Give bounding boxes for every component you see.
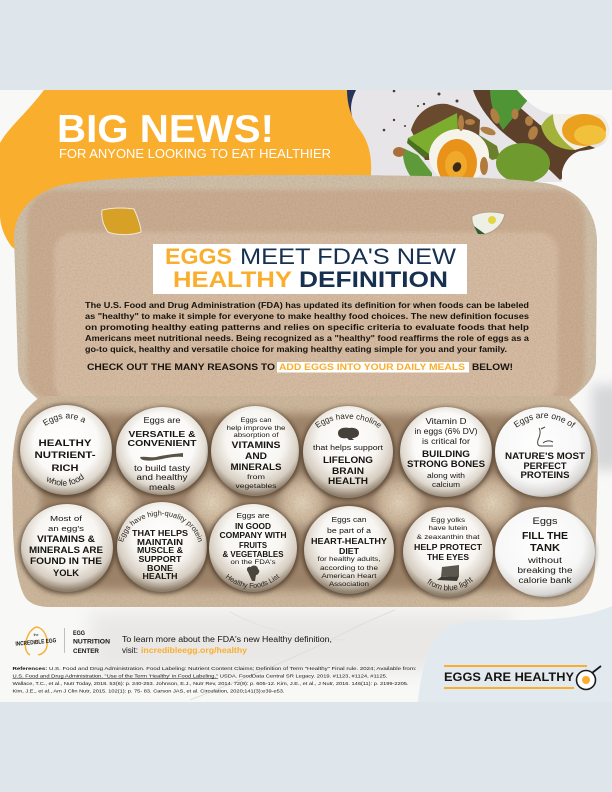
egg: heart-healthy diet: be part of a xyxy=(327,526,372,535)
badge: eggs are healthy xyxy=(444,665,601,690)
egg: vitamins and minerals: from xyxy=(247,474,266,481)
website note: To learn more about the FDA's new Healthy definition, xyxy=(122,634,332,644)
logo: the incredible egg: the xyxy=(34,633,38,637)
egg: vitamins in the yolk xyxy=(19,504,115,594)
intro paragraph: The U.S. Food and Drug Administration (FDA) has updated its definition for when foods can be labeled xyxy=(85,301,529,310)
title box: DEFINITION xyxy=(299,267,448,292)
egg: versatile and convenient xyxy=(114,407,210,497)
logo: egg nutrition center: EGG xyxy=(73,630,85,637)
egg: fill the tank: breaking the xyxy=(518,566,573,575)
title box: HEALTHY xyxy=(173,267,292,292)
egg: healthy nutrient-rich xyxy=(15,401,116,500)
egg: heart-healthy diet: Association xyxy=(329,581,369,588)
egg: vitamins and minerals: VITAMINS xyxy=(232,440,280,450)
logo: the incredible egg: INCREDIBLE EGG xyxy=(15,638,57,648)
egg: vitamins in the yolk: MINERALS ARE xyxy=(29,545,103,555)
egg: help protect the eyes: & zeaxanthin that xyxy=(416,534,480,541)
headline xyxy=(57,108,331,161)
egg: heart-healthy diet: according to the xyxy=(320,565,378,572)
references: Wallace, T.C., et al., Nutr Today, 2018. 53(6): p. 240-253. Johnson, E.J., Nutr Rev, 2014. 72(9): p. 605-12. Kim, J.E., et al., J Nutr, 2016. 146(11): p. 2199-2205. xyxy=(12,681,408,687)
egg: building strong bones: in eggs (6% DV) xyxy=(414,427,478,436)
egg: healthy nutrient-rich: NUTRIENT- xyxy=(34,450,96,460)
egg: good company with fruits and vegetables: IN GOOD xyxy=(235,522,271,531)
egg: high-quality protein: BONE xyxy=(147,564,174,573)
egg: vitamins and minerals: help improve the xyxy=(226,425,286,432)
call to action line: BELOW! xyxy=(472,362,513,372)
egg: help protect the eyes: from blue light xyxy=(427,577,473,590)
egg: versatile and convenient: Eggs are xyxy=(144,416,180,425)
egg: heart-healthy diet: DIET xyxy=(339,547,359,556)
website note xyxy=(122,634,332,655)
egg: good company with fruits and vegetables: on the FDA's xyxy=(230,559,276,566)
logo: egg nutrition center: NUTRITION xyxy=(73,638,110,646)
egg: building strong bones xyxy=(398,407,494,499)
lid hole left xyxy=(102,208,141,235)
egg: fill the tank: Eggs xyxy=(532,515,558,526)
egg: good company with fruits and vegetables: & VEGETABLES xyxy=(222,550,284,559)
egg: building strong bones: Vitamin D xyxy=(426,417,467,426)
egg: fill the tank xyxy=(494,507,596,599)
title box: MEET FDA'S NEW xyxy=(240,244,456,269)
icon: frying pan xyxy=(576,666,601,690)
egg: nature's most perfect proteins: NATURE'S MOST xyxy=(505,451,586,461)
intro paragraph: as "healthy" to make it simple for everyone to make healthy food choices. The new definition focuses xyxy=(85,312,530,321)
website note: incredibleegg.org/healthy xyxy=(141,645,247,655)
logo: egg nutrition center: CENTER xyxy=(73,648,99,655)
references xyxy=(12,666,416,694)
egg: vitamins in the yolk: an egg's xyxy=(48,524,84,533)
egg: nature's most perfect proteins xyxy=(490,404,596,501)
egg: versatile and convenient: CONVENIENT xyxy=(128,438,197,448)
food photo: avocado toast with eggs xyxy=(347,90,612,187)
egg: fill the tank: without xyxy=(527,556,563,565)
title box xyxy=(153,244,467,294)
icon: brain xyxy=(338,428,359,440)
logo: egg nutrition center xyxy=(64,628,110,655)
egg: versatile and convenient: VERSATILE & xyxy=(128,429,196,439)
egg: high-quality protein: MUSCLE & xyxy=(137,546,183,555)
egg: nature's most perfect proteins: Eggs are one of xyxy=(514,413,576,428)
egg: vitamins and minerals: Eggs can xyxy=(240,417,272,424)
egg: good company with fruits and vegetables: Healthy Foods List xyxy=(226,574,280,589)
egg: high-quality protein xyxy=(112,500,210,597)
egg: vitamins in the yolk: Most of xyxy=(50,514,83,523)
egg: vitamins and minerals: absorption of xyxy=(234,432,279,439)
egg: lifelong brain health: Eggs have choline xyxy=(315,414,381,428)
title box: EGGS xyxy=(165,244,232,269)
subhead: FOR ANYONE LOOKING TO EAT HEALTHIER xyxy=(59,146,331,161)
egg: high-quality protein: THAT HELPS xyxy=(132,529,189,538)
egg: heart-healthy diet: for healthy adults, xyxy=(318,556,381,563)
intro paragraph: on promoting healthy eating patterns and relies on specific criteria to evaluate foods that help xyxy=(85,323,529,332)
egg: building strong bones: STRONG BONES xyxy=(407,459,485,469)
egg: high-quality protein: MAINTAIN xyxy=(137,538,183,547)
egg: healthy nutrient-rich: Eggs are a xyxy=(42,414,86,426)
egg: fill the tank: TANK xyxy=(530,542,560,554)
egg: vitamins and minerals: vegetables xyxy=(236,483,277,490)
egg: help protect the eyes: HELP PROTECT xyxy=(414,543,482,552)
egg: heart-healthy diet xyxy=(302,505,396,597)
intro paragraph xyxy=(85,301,530,354)
egg: heart-healthy diet: Eggs can xyxy=(332,515,366,524)
references: U.S. Food and Drug Administration. "Use of the Term 'Healthy' in Food Labeling." USDA. FoodData Central SR Legacy. 2019. #1123, #1124, #1125. xyxy=(12,674,388,680)
egg: good company with fruits and vegetables: FRUITS xyxy=(239,541,268,550)
egg: healthy nutrient-rich: whole food xyxy=(46,473,84,486)
egg: vitamins in the yolk: VITAMINS & xyxy=(37,534,96,544)
egg: lifelong brain health: LIFELONG xyxy=(323,455,373,465)
badge: eggs are healthy: EGGS ARE HEALTHY xyxy=(444,670,574,684)
egg: good company with fruits and vegetables: COMPANY WITH xyxy=(220,531,287,540)
egg: heart-healthy diet: HEART-HEALTHY xyxy=(311,537,388,546)
icon: laptop xyxy=(437,565,459,581)
egg carton: open lid xyxy=(14,175,597,402)
website note: visit: xyxy=(122,645,138,655)
egg: heart-healthy diet: American Heart xyxy=(322,573,377,580)
egg: lifelong brain health: BRAIN xyxy=(332,466,364,476)
egg: lifelong brain health: that helps support xyxy=(313,443,384,452)
icon: fork xyxy=(140,453,183,461)
egg: versatile and convenient: and healthy xyxy=(136,473,188,482)
logo: the incredible egg xyxy=(15,627,57,655)
egg: help protect the eyes xyxy=(398,504,496,602)
egg: building strong bones: is critical for xyxy=(422,437,470,446)
egg: building strong bones: calcium xyxy=(432,482,460,489)
egg: vitamins in the yolk: YOLK xyxy=(53,568,80,578)
egg: high-quality protein: SUPPORT xyxy=(138,555,182,564)
egg: vitamins in the yolk: FOUND IN THE xyxy=(30,556,102,566)
egg: healthy nutrient-rich: RICH xyxy=(52,463,78,473)
intro paragraph: go-to quick, healthy and versatile choice for making healthy eating simple for you and your family. xyxy=(85,345,507,354)
icon: flexed arm xyxy=(538,427,553,446)
egg: nature's most perfect proteins: PERFECT xyxy=(524,461,567,471)
lid hole right xyxy=(472,212,505,235)
egg: nature's most perfect proteins: PROTEINS xyxy=(520,470,570,480)
egg: lifelong brain health: HEALTH xyxy=(328,476,368,486)
intro paragraph: Americans meet nutritional needs. Being recognized as a "healthy" food reaffirms the role of eggs as a xyxy=(85,334,530,343)
egg: good company with fruits and vegetables: Eggs are xyxy=(236,511,270,520)
call to action line xyxy=(87,362,513,372)
egg: help protect the eyes: THE EYES xyxy=(427,553,470,562)
marble panel xyxy=(0,90,612,702)
call to action line: ADD EGGS INTO YOUR DAILY MEALS xyxy=(279,362,465,372)
references: Kim, J.E., et al., Am J Clin Nutr, 2015. 102(1): p. 75- 83. Carson JAS, et al. Circulation, 2020;141(3):e39-e53. xyxy=(12,688,284,694)
references: References: U.S. Food and Drug Administration. Food Labeling: Nutrient Content Claims; Definition of Term "Healthy" Final rule. 2024; Available from: xyxy=(12,666,416,672)
egg: vitamins and minerals: AND xyxy=(245,451,268,461)
egg: help protect the eyes: Egg yolks xyxy=(431,517,466,524)
egg: good company with fruits and vegetables xyxy=(204,502,301,597)
light blue corner shape xyxy=(418,606,612,702)
egg: high-quality protein: Eggs have high-quality protein xyxy=(118,510,202,542)
egg: vitamins and minerals: MINERALS xyxy=(230,462,282,472)
egg: fill the tank: FILL THE xyxy=(522,530,568,542)
egg: versatile and convenient: to build tasty xyxy=(134,464,190,473)
egg: versatile and convenient: meals xyxy=(149,483,175,492)
egg: high-quality protein: HEALTH xyxy=(142,572,178,581)
call to action line: CHECK OUT THE MANY REASONS TO xyxy=(87,362,275,372)
yellow banner shape xyxy=(0,90,371,260)
egg: lifelong brain health xyxy=(298,403,397,502)
egg: building strong bones: along with xyxy=(427,473,465,480)
egg: building strong bones: BUILDING xyxy=(422,449,470,459)
headline: BIG NEWS! xyxy=(57,108,274,151)
egg carton: tray xyxy=(12,396,598,607)
egg: healthy nutrient-rich: HEALTHY xyxy=(38,438,92,448)
egg: fill the tank: calorie bank xyxy=(518,576,573,585)
egg: vitamins and minerals xyxy=(209,406,301,498)
egg: help protect the eyes: have lutein xyxy=(428,525,468,532)
icon: broccoli xyxy=(247,566,259,581)
